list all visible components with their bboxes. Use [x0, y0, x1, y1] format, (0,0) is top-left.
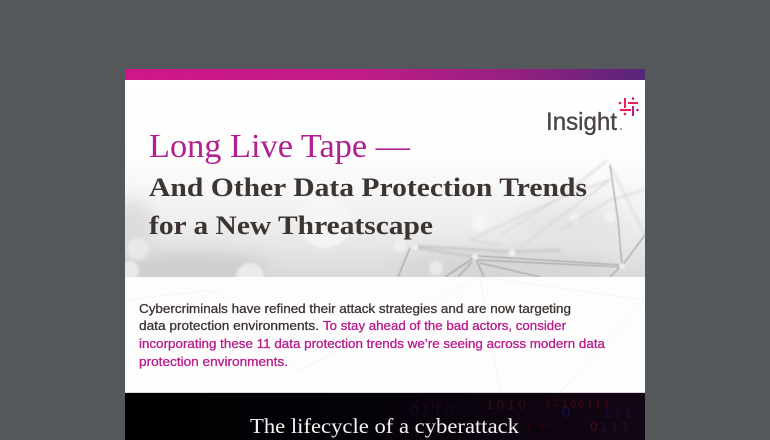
binary digits decoration: 1 0 0 1 1 1 — [562, 399, 610, 410]
intro text: incorporating these 11 data protection trends we’re seeing across modern data — [139, 336, 606, 351]
intro text: protection environments. — [139, 354, 288, 369]
binary digits decoration: 1 1 1 — [603, 405, 632, 420]
header gradient bar — [125, 69, 645, 80]
binary digits decoration: 1 0 1 0 — [486, 397, 526, 412]
icon: logo hash mark — [619, 97, 639, 116]
separator — [125, 392, 645, 393]
binary digits decoration: 0 — [590, 418, 598, 434]
intro text: Cybercriminals have refined their attack strategies and are now targeting — [139, 301, 571, 316]
binary digits decoration: 1 1 — [545, 398, 559, 409]
heading line 1: And Other Data Protection Trends — [149, 172, 587, 202]
binary digits decoration: 0 1 1 0 — [410, 402, 453, 418]
logo wordmark: Insight — [546, 108, 617, 136]
binary digits decoration: 0 — [562, 404, 570, 421]
panel: lifecycle banner — [125, 393, 645, 440]
intro text: data protection environments. — [139, 318, 319, 333]
intro text — [139, 301, 606, 369]
binary digits decoration: 1 1 1 — [600, 419, 629, 434]
heading line 2: for a New Threatscape — [149, 210, 433, 240]
panel: intro — [125, 277, 645, 392]
binary digits decoration: 1 · 0 0 — [526, 421, 552, 431]
binary digits decoration — [410, 398, 632, 432]
panel: hero background with network image — [125, 80, 645, 277]
logo period — [620, 128, 622, 130]
logo: Insight — [546, 97, 639, 136]
intro text: To stay ahead of the bad actors, consider — [323, 318, 567, 333]
binary digits decoration: 1 0 1 0 — [415, 399, 443, 409]
title: Long Live Tape: Long Live Tape — — [149, 128, 411, 165]
heading: lifecycle: The lifecycle of a cyberattack — [250, 414, 520, 438]
